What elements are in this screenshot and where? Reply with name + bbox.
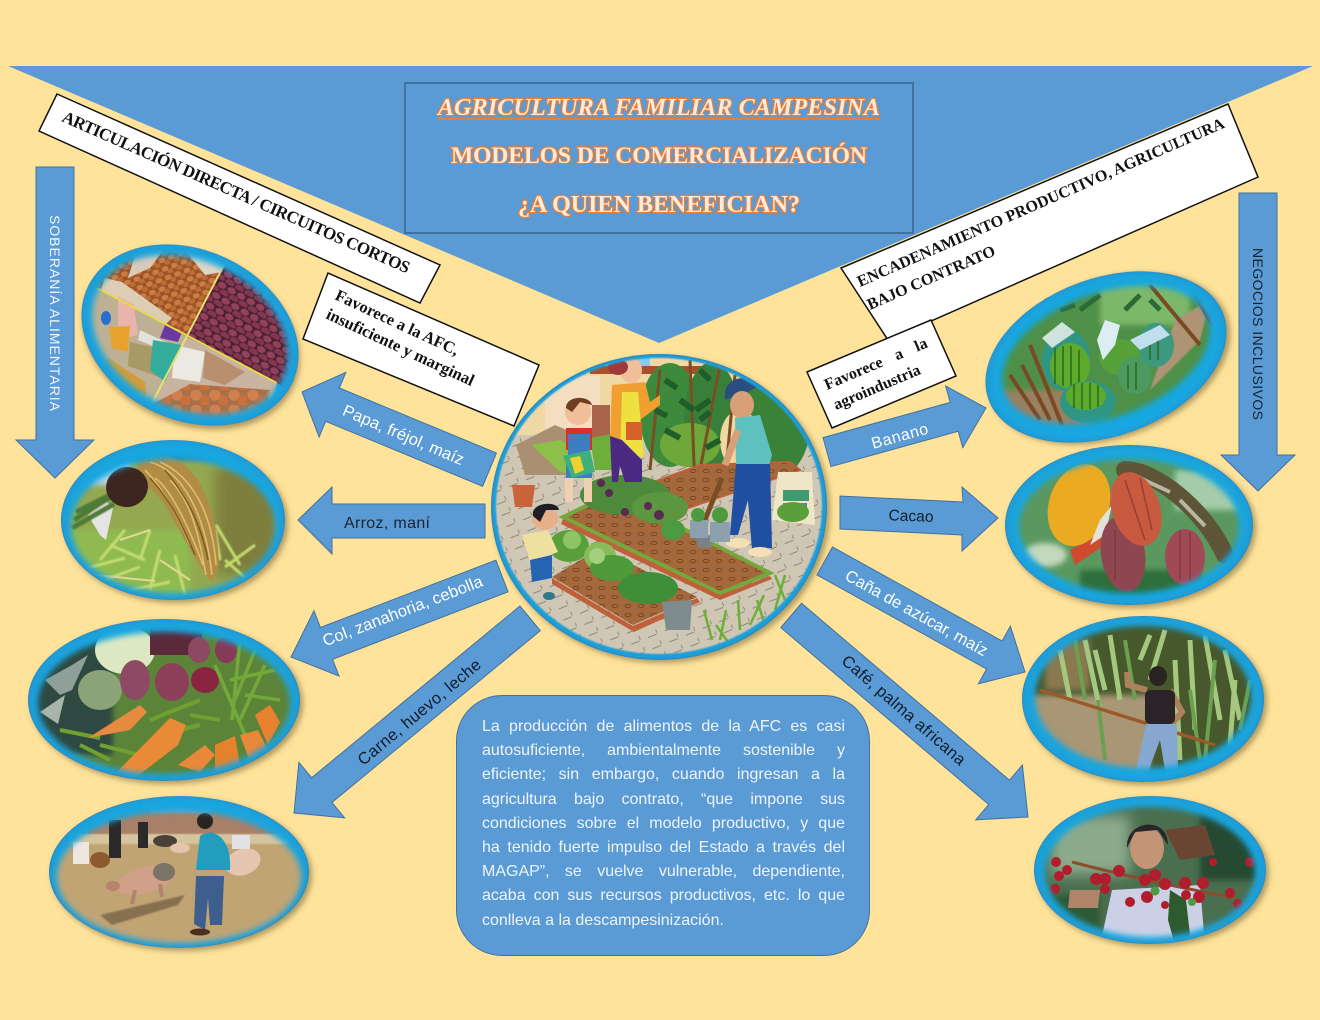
photo: cacao pods [1003,445,1255,610]
label: articulación directa: ARTICULACIÓN DIRECTA / CIRCUITOS CORTOS [59,107,413,277]
arrow: cacao [840,487,998,551]
text panel: AFC explanation: agricultura bajo contrato, “que impone sus [482,791,845,808]
label: encadenamiento productivo [841,104,1258,340]
arrow: carne, huevo, leche [271,591,553,841]
photo: peanuts, beans, corn, onions [80,244,304,433]
figure: boy [522,504,559,600]
arrow: papa, fréjol, maíz: Papa, fréjol, maíz [340,402,467,469]
label: favorece a la agroindustria: agroindustria [831,362,923,414]
bucket [662,600,692,630]
arrow: cacao: Cacao [888,507,934,526]
arrow: arroz, maní: Arroz, maní [344,515,431,532]
title box [405,83,913,233]
arrow: soberanía alimentaria [16,167,94,478]
photo: pig market [48,796,313,950]
title: agricultura familiar campesina [436,95,880,218]
text panel: AFC explanation: ha tenido fuerte impulso del Estado a través del [482,839,845,856]
arrow: col, zanahoria, cebolla: Col, zanahoria, cebolla [320,572,486,650]
text panel: AFC explanation: La producción de alimentos de la AFC es casi [482,718,845,735]
photo: vegetables [28,619,303,785]
raised bed: lettuce [549,530,700,632]
label: favorece a la AFC [303,273,539,426]
raised bed: eggplants [561,475,772,600]
label: favorece a la AFC: insuficiente y marginal [323,304,478,390]
title: agricultura familiar campesina: MODELOS DE COMERCIALIZACIÓN [451,142,867,169]
text panel: AFC explanation: acaba con sus recursos productivos, etc. lo que [482,887,845,904]
sack of fertilizer [772,472,815,525]
title: agricultura familiar campesina: AGRICULTURA FAMILIAR CAMPESINA [436,95,880,121]
text panel: AFC explanation: autosuficiente, ambientalmente sostenible y [482,742,845,759]
text panel: AFC explanation: conlleva a la descampesinización. [482,912,724,929]
potted seedlings [690,507,730,542]
arrow: banano: Banano [870,421,930,453]
label: favorece a la agroindustria: Favorece a la [822,335,930,394]
arrow: caña de azúcar, maíz: Caña de azúcar, maíz [842,567,991,660]
plants on trellis [640,360,808,470]
top banner triangle [8,66,1313,343]
arrow: café, palma africana: Café, palma africana [838,652,970,770]
arrow: negocios inclusivos: NEGOCIOS INCLUSIVOS [1250,248,1266,420]
label: favorece a la agroindustria [807,320,956,428]
arrow: arroz, maní [298,487,485,554]
arrow: caña de azúcar, maíz [809,532,1041,701]
arrow: col, zanahoria, cebolla [278,543,515,690]
photo: banana plantation [985,270,1234,448]
figure: man [693,378,772,557]
label: favorece a la AFC: Favorece a la AFC, [332,285,462,359]
label: encadenamiento productivo: BAJO CONTRATO [865,243,998,314]
photo: sugar cane worker [1020,615,1266,785]
arrow: negocios inclusivos [1221,193,1295,491]
grass [704,575,785,645]
photo: coffee picker [1032,795,1268,945]
photo: rice harvest [60,440,290,600]
central illustration: family garden [490,350,830,665]
title: agricultura familiar campesina: ¿A QUIEN BENEFICIAN? [518,192,800,218]
arrow: banano [818,377,995,483]
figure: woman [608,357,660,482]
arrow: soberanía alimentaria: SOBERANÍA ALIMENTARIA [47,215,63,412]
text panel: AFC explanation: MAGAP”, se vuelve vulnerable, dependiente, [482,863,845,880]
arrow: papa, fréjol, maíz [289,360,503,502]
flower pot [512,485,535,507]
text panel: AFC explanation: eficiente; sin embargo, cuando ingresan a la [482,766,845,783]
arrow: café, palma africana [768,588,1051,844]
text panel: AFC explanation: condiciones sobre el modelo productivo, y que [482,815,845,832]
figure: girl [563,398,595,502]
label: encadenamiento productivo: ENCADENAMIENTO PRODUCTIVO, AGRICULTURA [855,115,1228,291]
text panel: AFC explanation [456,695,870,956]
arrow: carne, huevo, leche: Carne, huevo, leche [354,656,485,769]
